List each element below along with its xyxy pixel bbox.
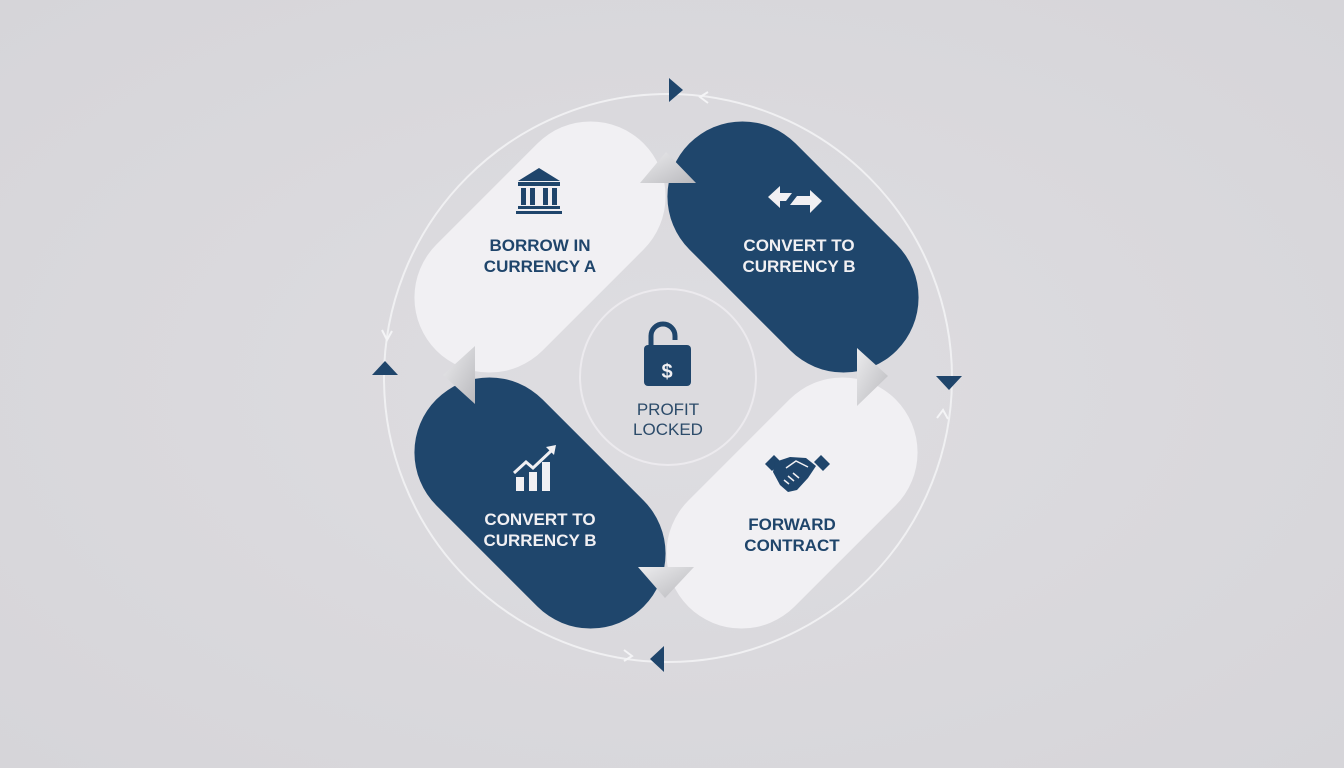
pill: forward contract: CONTRACT <box>744 536 840 555</box>
icon: unlocked padlock: $ <box>661 361 673 383</box>
pill: convert to currency B (top right) <box>636 90 950 404</box>
notch arrows between pills <box>443 152 888 598</box>
icon: handshake <box>765 455 830 492</box>
label: CONVERT TO <box>484 510 596 529</box>
pill: convert to currency B (bottom left) <box>383 346 697 660</box>
label: PROFIT <box>637 400 699 419</box>
center: profit locked <box>580 289 756 465</box>
icon: growth chart <box>514 445 556 491</box>
pill: convert to currency B (bottom left): CURRENCY B <box>483 531 597 550</box>
label: FORWARD <box>748 515 836 534</box>
center: profit locked: LOCKED <box>633 420 703 439</box>
icon: bank <box>516 168 562 214</box>
label: CONVERT TO <box>743 236 855 255</box>
icon: exchange arrows <box>768 186 822 213</box>
icon: unlocked padlock <box>644 324 691 386</box>
label: BORROW IN <box>489 236 591 255</box>
outer cycle ring <box>384 94 952 662</box>
pill: convert to currency B (top right): CURRENCY B <box>742 257 856 276</box>
ring arrowheads <box>372 78 962 672</box>
pill: borrow in currency A <box>383 90 697 404</box>
pill: forward contract <box>635 346 949 660</box>
pill: borrow in currency A: CURRENCY A <box>484 257 596 276</box>
